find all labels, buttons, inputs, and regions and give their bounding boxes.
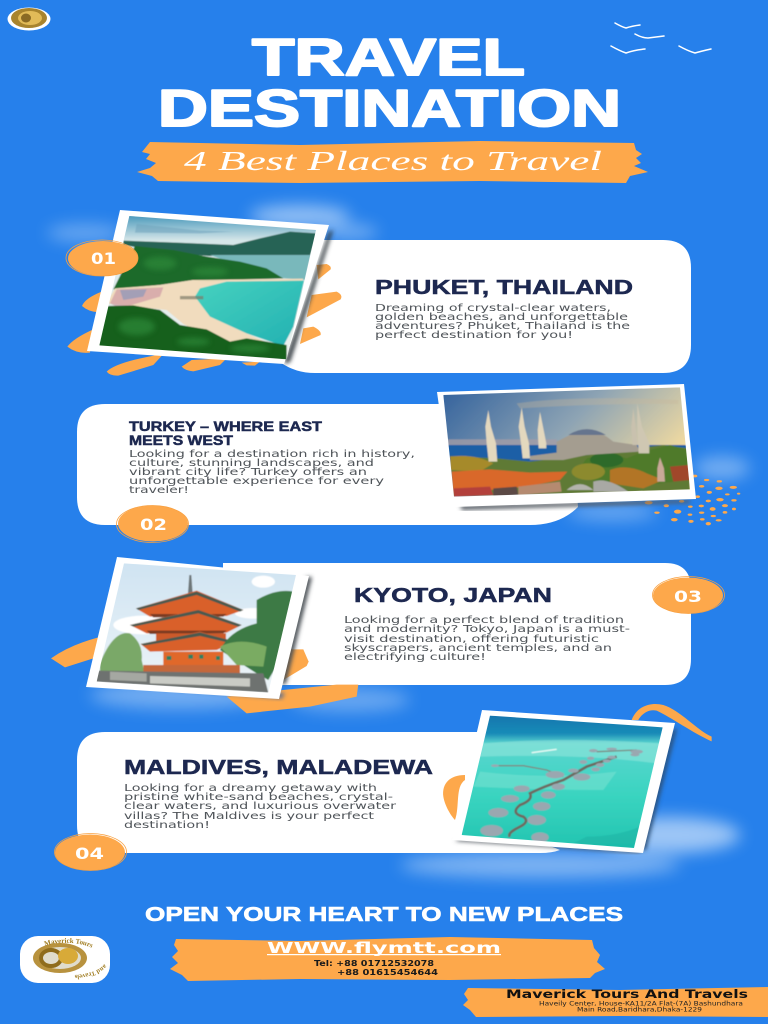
description: visit destination, offering futuristic <box>344 634 599 645</box>
card <box>77 732 560 853</box>
title: DESTINATION <box>158 80 621 138</box>
title <box>158 29 621 138</box>
description: skyscrapers, ancient temples, and an <box>344 643 612 654</box>
title: TRAVEL <box>252 29 525 87</box>
contact banner: Tel: +88 01712532078 <box>314 959 435 968</box>
description <box>124 783 396 831</box>
description: clear waters, and luxurious overwater <box>124 801 396 812</box>
card <box>77 404 578 525</box>
description: Dreaming of crystal-clear waters, <box>375 303 611 314</box>
description <box>344 615 630 663</box>
badge 04: 04 <box>75 844 104 863</box>
contact banner: WWW.flymtt.com <box>267 939 501 957</box>
badge 02: 02 <box>140 515 167 534</box>
photo: beach <box>99 216 316 360</box>
badge 03: 03 <box>674 587 702 606</box>
photo: mosque <box>440 385 697 500</box>
logo: bottom left: Maverick Tours <box>44 938 93 948</box>
badge 01: 01 <box>91 249 116 268</box>
description: culture, stunning landscapes, and <box>129 458 374 469</box>
photo: overwater villas <box>460 713 667 850</box>
subtitle banner <box>137 141 648 183</box>
description: destination! <box>124 820 210 831</box>
card <box>280 240 691 373</box>
description: electrifying culture! <box>344 652 486 663</box>
address banner: Haveily Center, House-KA11/2A Flat-(7A) Bashundhara <box>539 1000 743 1008</box>
description <box>129 449 415 496</box>
description: unforgettable experience for every <box>129 476 385 487</box>
badge 02 <box>116 506 188 542</box>
orange crescent: left <box>443 775 465 820</box>
orange brush strokes <box>51 637 358 713</box>
photo frame <box>460 500 690 510</box>
photo frame <box>284 230 333 364</box>
photo frame <box>640 728 677 850</box>
photo frame <box>280 577 312 684</box>
description: traveler! <box>129 485 189 496</box>
description: adventures? Phuket, Thailand is the <box>375 321 630 332</box>
description: and modernity? Tokyo, Japan is a must- <box>344 624 630 635</box>
tagline: OPEN YOUR HEART TO NEW PLACES <box>145 904 623 926</box>
heading: MALDIVES, MALADEWA <box>124 756 433 779</box>
heading: KYOTO, JAPAN <box>354 585 552 607</box>
heading: PHUKET, THAILAND <box>375 277 633 299</box>
badge 03 <box>652 576 724 614</box>
address banner: Maverick Tours And Travels <box>506 987 748 1001</box>
description: Looking for a perfect blend of tradition <box>344 615 624 626</box>
description: villas? The Maldives is your perfect <box>124 811 375 822</box>
panel: Phuket <box>66 210 691 376</box>
orange swoosh: top right <box>632 704 712 741</box>
birds <box>611 23 711 53</box>
description: perfect destination for you! <box>375 330 573 341</box>
orange dots <box>645 475 740 525</box>
description: Looking for a dreamy getaway with <box>124 783 377 794</box>
contact banner: +88 01615454644 <box>337 968 439 977</box>
logo: bottom left <box>20 936 110 983</box>
description: pristine white-sand beaches, crystal- <box>124 792 393 803</box>
logo: top left <box>8 8 50 30</box>
address banner <box>463 987 768 1017</box>
foliage shading <box>118 257 270 352</box>
badge 04 <box>54 834 126 870</box>
photo: pagoda <box>93 560 300 697</box>
logo: bottom left: and Travels <box>74 964 106 980</box>
orange brush strokes <box>67 264 341 376</box>
description: golden beaches, and unforgettable <box>375 312 628 323</box>
badge 01 <box>66 240 138 276</box>
panel: Kyoto <box>51 557 725 713</box>
panel: Maldives <box>54 704 712 870</box>
heading: MEETS WEST <box>129 433 234 448</box>
panel: Turkey <box>77 384 740 542</box>
description: vibrant city life? Turkey offers an <box>129 467 367 478</box>
description: Looking for a destination rich in history, <box>129 449 415 460</box>
heading: TURKEY – WHERE EAST <box>129 419 323 434</box>
address banner: Main Road,Baridhara,Dhaka-1229 <box>577 1006 702 1014</box>
heading <box>129 419 323 448</box>
description <box>375 303 630 341</box>
subtitle banner: 4 Best Places to Travel <box>184 146 602 176</box>
card <box>223 563 691 685</box>
contact banner <box>170 937 605 981</box>
clouds <box>47 205 750 878</box>
